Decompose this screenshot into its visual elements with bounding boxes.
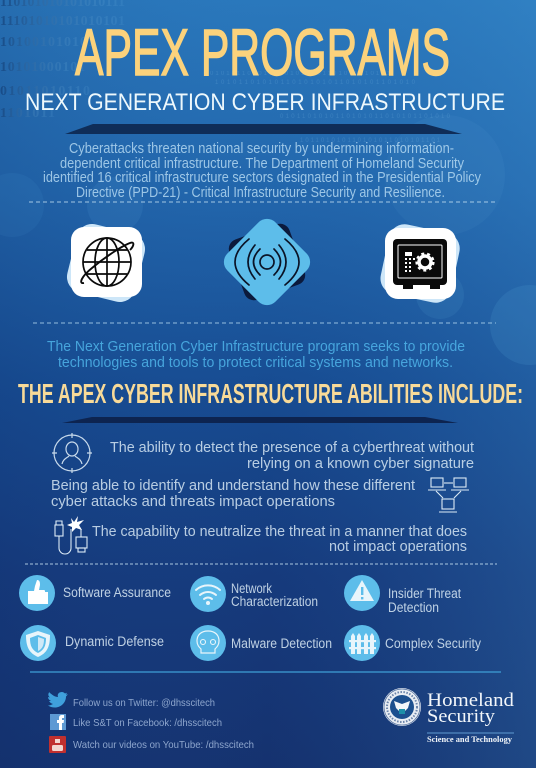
icon: wireless signal diamond (219, 214, 315, 310)
heading divider bar (62, 417, 458, 423)
icon: usb spark (55, 516, 87, 554)
ability 1 (110, 440, 474, 472)
program description: The Next Generation Cyber Infrastructure program seeks to provide (47, 338, 465, 355)
binary background pattern: 11101010101010101 (0, 14, 125, 29)
feature: malware detection: Malware Detection (231, 636, 332, 651)
feature: insider threat detection: Insider Threat (388, 586, 461, 601)
intro text block (43, 141, 482, 201)
binary band: 1010110101011010101011010101101010 (215, 80, 416, 86)
feature: malware detection (190, 625, 332, 661)
intro text block: dependent critical infrastructure. The Department of Homeland Security (60, 156, 465, 172)
ability 1: The ability to detect the presence of a cyberthreat without (110, 440, 474, 456)
feature: complex security: Complex Security (385, 636, 481, 651)
feature: dynamic defense: Dynamic Defense (65, 634, 164, 649)
feature: network characterization: Network (231, 581, 272, 596)
icon: youtube (49, 736, 66, 753)
binary band (210, 71, 451, 144)
ability 3 (92, 524, 467, 555)
program description (47, 338, 465, 371)
icon: twitter (48, 692, 68, 708)
binary band: 0101101010110101011010101101010 (280, 114, 451, 120)
logo: Homeland Security wordmark: Homeland (427, 690, 515, 711)
feature: software assurance: Software Assurance (63, 585, 171, 600)
title divider bar (65, 124, 462, 134)
facebook text: Like S&T on Facebook: /dhsscitech (73, 717, 222, 729)
icon: network computers (428, 478, 469, 512)
feature: software assurance (19, 575, 171, 611)
twitter text: Follow us on Twitter: @dhsscitech (73, 697, 215, 709)
binary band: 101101010110101011010101101 (300, 138, 441, 144)
feature: insider threat detection: Detection (388, 600, 439, 615)
ability 3: The capability to neutralize the threat in a manner that does (92, 524, 467, 540)
logo: DHS seal (383, 688, 421, 726)
icon: safe (378, 221, 463, 306)
logo: Homeland Security wordmark: Science and Technology (427, 735, 512, 744)
icon: globe (64, 221, 148, 305)
ability 1: relying on a known cyber signature (247, 456, 474, 472)
feature: dynamic defense (20, 625, 164, 661)
logo: Homeland Security wordmark: Security (427, 706, 496, 727)
ability 3: not impact operations (329, 539, 467, 555)
intro text block: Directive (PPD-21) - Critical Infrastructure Security and Resilience. (76, 185, 445, 201)
intro text block: identified 16 critical infrastructure sectors designated in the Presidential Policy (43, 170, 482, 186)
ability 2: cyber attacks and threats impact operations (51, 494, 335, 510)
binary background pattern (0, 0, 125, 121)
intro text block: Cyberattacks threaten national security by undermining information- (69, 141, 454, 157)
binary background pattern: 10101000101 (0, 60, 85, 75)
youtube text: Watch our videos on YouTube: /dhsscitech (73, 739, 254, 751)
binary background pattern: 101001010101 (0, 35, 95, 50)
icon: user target (52, 433, 92, 473)
feature: network characterization (190, 576, 318, 612)
logo: Homeland Security wordmark (427, 690, 515, 744)
ability 2 (51, 478, 415, 510)
feature: complex security (344, 625, 481, 661)
program description: technologies and tools to protect critical systems and networks. (58, 354, 453, 371)
binary background pattern: 01011010110 (0, 84, 90, 99)
feature: insider threat detection (344, 575, 461, 615)
ability 2: Being able to identify and understand how these different (51, 478, 415, 494)
binary background pattern: 1101011 (0, 106, 55, 121)
binary band: 0101011010101101010101101010110101 (210, 71, 391, 77)
icon: facebook (50, 714, 66, 730)
feature: network characterization: Characterization (231, 594, 318, 609)
